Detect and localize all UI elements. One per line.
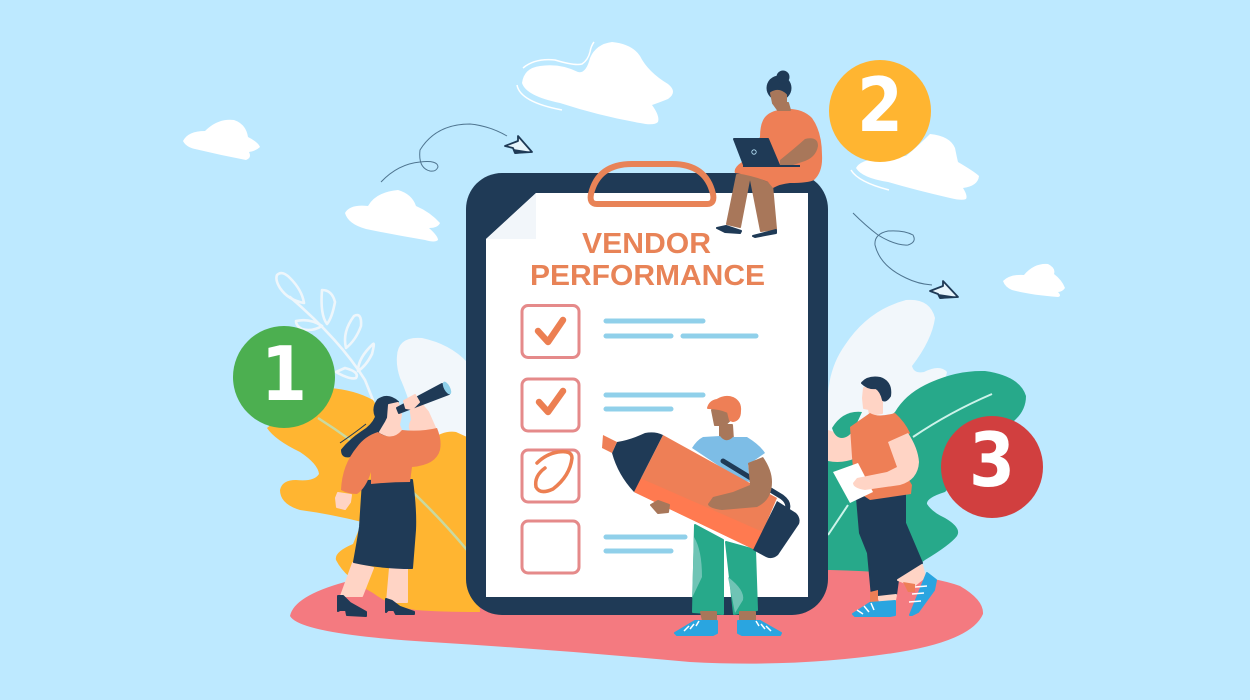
- number badge 3: [941, 416, 1043, 518]
- shoes: [338, 596, 414, 616]
- hand: [651, 501, 669, 513]
- ground: [290, 570, 983, 664]
- right arm: [853, 433, 919, 490]
- skirt: [354, 480, 415, 568]
- person: man with paper: [828, 378, 936, 616]
- cloud: small left: [183, 120, 260, 160]
- dress: [735, 109, 822, 188]
- clipboard board: [466, 173, 828, 615]
- item 3: circled: [522, 450, 579, 502]
- neck: [720, 425, 733, 441]
- arm: [780, 138, 818, 166]
- clipboard: [466, 164, 828, 615]
- ankles: [878, 565, 925, 601]
- shoes: [675, 621, 781, 635]
- neck: [773, 103, 790, 110]
- paper: [833, 463, 873, 503]
- green leaf lobe: [832, 412, 862, 438]
- plant: green leaf: [828, 371, 1026, 575]
- trouser highlights: [692, 537, 743, 613]
- cloud: small right: [1003, 264, 1065, 297]
- face: [712, 406, 730, 425]
- blouse: [341, 428, 441, 494]
- shoes: [853, 573, 936, 616]
- shoelaces: [684, 621, 771, 631]
- shirt: [692, 436, 765, 482]
- title: [530, 228, 765, 292]
- number badge 2: 2: [857, 61, 903, 149]
- telescope: [397, 384, 449, 413]
- hand on telescope: [404, 395, 419, 409]
- cloud: top centre: [517, 42, 673, 124]
- flight path: left paper plane: [381, 124, 532, 182]
- shoelaces: [857, 586, 927, 614]
- marker: [602, 432, 800, 558]
- flight path: right paper plane: [853, 213, 958, 299]
- hair: [766, 70, 792, 100]
- t-shirt: [850, 413, 912, 500]
- face: [771, 91, 786, 106]
- ankles: [701, 612, 755, 621]
- clipboard paper: [486, 193, 808, 597]
- trousers: [693, 525, 757, 614]
- hair: [708, 397, 740, 421]
- arm: [708, 457, 772, 510]
- item 2: checked: [522, 379, 703, 431]
- title: PERFORMANCE: [530, 260, 765, 292]
- icon: paper plane left: [505, 136, 532, 154]
- legs: [727, 175, 776, 231]
- trousers: [857, 495, 922, 597]
- hair: [342, 397, 398, 456]
- cloud: middle left: [345, 190, 440, 242]
- neck and face: [863, 388, 882, 415]
- person: woman with telescope: [336, 380, 453, 616]
- hair: [862, 378, 890, 400]
- person: man with marker: [602, 397, 800, 635]
- plant: pale blob right: [828, 300, 947, 450]
- title: VENDOR: [582, 228, 711, 260]
- shoes: [717, 226, 776, 237]
- icon: paper plane right: [930, 281, 958, 299]
- checklist: [522, 306, 756, 573]
- plant: yellow leaf: [267, 388, 480, 612]
- number badge 1: 1: [261, 330, 307, 418]
- left arm: [828, 430, 856, 462]
- number badge 2: [829, 60, 931, 162]
- legs: [341, 563, 407, 602]
- number badge 3: 3: [969, 416, 1015, 504]
- person: woman with laptop: [717, 70, 822, 237]
- plant: pale blob left: [397, 338, 467, 440]
- item 1: checked: [522, 306, 756, 358]
- number badge 1: [233, 326, 335, 428]
- item 4: empty: [522, 521, 685, 573]
- face and neck: [380, 403, 402, 436]
- raised arm: [410, 400, 436, 434]
- clipboard clip: [591, 164, 713, 204]
- cloud: behind number 2: [851, 134, 979, 200]
- socks: [870, 582, 915, 603]
- plant: white outline leaves: [276, 273, 374, 400]
- hand: [336, 493, 351, 509]
- paper fold: [486, 193, 536, 239]
- laptop: [734, 139, 800, 166]
